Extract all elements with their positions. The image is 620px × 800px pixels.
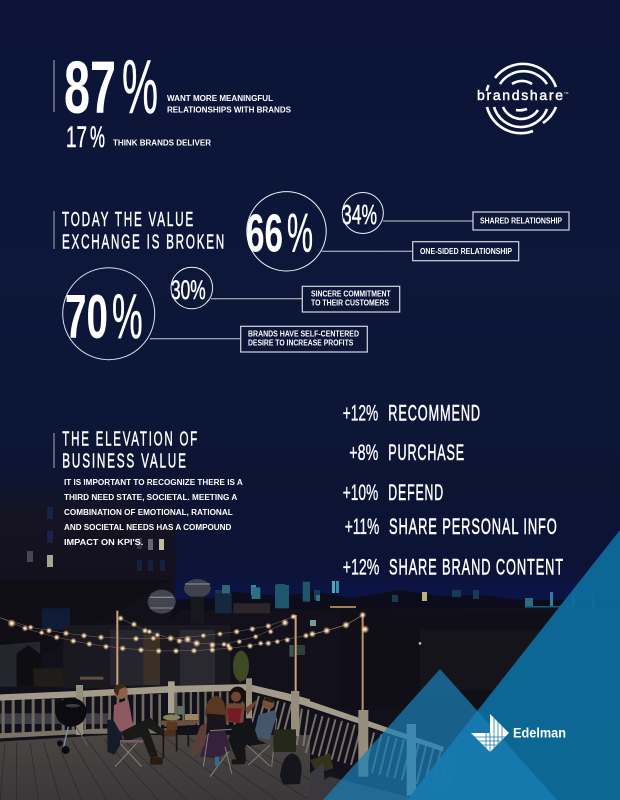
planter (273, 729, 296, 752)
heading: BUSINESS VALUE (62, 451, 188, 473)
stat: 66% one-sided relationship: ONE-SIDED RELATIONSHIP (420, 247, 513, 256)
87 percent figure: % (122, 45, 158, 130)
stat: 70% self-centered desire: DESIRE TO INCREASE PROFITS (248, 339, 354, 348)
body paragraph: THIRD NEED STATE, SOCIETAL. MEETING A (64, 493, 238, 502)
logo: brandshare: brandshare (477, 87, 563, 103)
section: today the value exchange is broken (54, 192, 569, 360)
rail continuing to the right (310, 701, 457, 800)
faded building behind text (0, 478, 175, 638)
kettle grill (55, 698, 88, 754)
logo: Edelman: Edelman (513, 725, 566, 741)
stat: 70% self-centered desire (63, 268, 367, 360)
stat: 66% one-sided relationship: % (287, 202, 313, 264)
third pole and lights (309, 611, 421, 712)
body paragraph (64, 478, 243, 547)
right section: pole, rail and far rooftops (309, 611, 457, 800)
light poles (116, 611, 297, 692)
man with beard (228, 697, 277, 767)
87 percent figure: 87 (64, 46, 116, 129)
stat: 66% one-sided relationship (246, 192, 519, 271)
body paragraph: IT IS IMPORTANT TO RECOGNIZE THERE IS A (64, 478, 243, 487)
17 percent caption: THINK BRANDS DELIVER (113, 139, 211, 148)
stat: 34% shared relationship: SHARED RELATIONSHIP (480, 216, 563, 226)
+12% recommend: RECOMMEND (388, 401, 481, 426)
+12% recommend: +12% (343, 401, 378, 426)
logo: brandshare (477, 64, 569, 133)
tree (233, 651, 249, 683)
+10% defend: DEFEND (388, 480, 444, 505)
+10% defend: +10% (343, 480, 378, 505)
+8% purchase: +8% (349, 440, 378, 465)
table (158, 706, 200, 758)
deck floor (0, 735, 310, 800)
seated man (107, 684, 176, 767)
body paragraph: COMBINATION OF EMOTIONAL, RATIONAL (64, 508, 233, 517)
17 percent figure: % (90, 121, 105, 154)
people around the table (107, 684, 302, 785)
walls and vents (0, 579, 310, 688)
dark mid-ground buildings (0, 580, 620, 800)
heading (62, 429, 199, 473)
logo: brandshare: TM (564, 91, 569, 95)
stat: 30% sincere commitment (171, 267, 400, 312)
stat: 70% self-centered desire: 70 (65, 283, 108, 352)
+12% recommend (343, 401, 481, 426)
+11% share personal info: +11% (345, 514, 379, 539)
KPI uplift list (343, 401, 564, 579)
stat: 66% one-sided relationship: 66 (246, 204, 283, 264)
+10% defend (343, 480, 444, 505)
stat block: 87% want more meaningful relationships (54, 45, 292, 154)
photo: rooftop party at night (0, 478, 620, 800)
city skyline (170, 581, 620, 640)
heading (62, 209, 226, 253)
blue triangle: large (407, 530, 620, 800)
stat: 34% shared relationship (342, 192, 569, 234)
woman laughing (226, 687, 257, 723)
87 percent caption (167, 94, 292, 114)
stat: 30% sincere commitment: TO THEIR CUSTOMERS (311, 299, 390, 308)
+12% share brand content (343, 554, 564, 579)
stat: 70% self-centered desire: BRANDS HAVE SELF-CENTERED (248, 330, 359, 339)
+8% purchase (349, 440, 465, 465)
stat: 30% sincere commitment: SINCERE COMMITMENT (311, 290, 391, 299)
heading: TODAY THE VALUE (62, 209, 195, 231)
logo: Edelman (471, 714, 566, 752)
body paragraph: IMPACT ON KPI'S. (64, 538, 143, 547)
heading: EXCHANGE IS BROKEN (62, 231, 226, 253)
stat: 30% sincere commitment: 30% (171, 275, 206, 305)
17 percent figure: 17 (66, 121, 87, 154)
blue triangle: small (323, 669, 557, 800)
string lights (0, 613, 309, 654)
left half of terrace, drawn in 3x crop coordinates (0, 579, 310, 800)
deck railing (0, 678, 310, 738)
87 percent caption: WANT MORE MEANINGFUL (167, 94, 273, 103)
stat: 70% self-centered desire: % (112, 282, 143, 352)
+11% share personal info (345, 514, 558, 539)
body paragraph: AND SOCIETAL NEEDS HAS A COMPOUND (64, 523, 232, 532)
woman seen from behind (190, 696, 232, 777)
backpack (280, 753, 302, 785)
stat: 34% shared relationship: 34% (342, 199, 377, 230)
+8% purchase: PURCHASE (388, 440, 465, 465)
section: the elevation of business value (54, 429, 243, 547)
+12% share brand content: +12% (343, 554, 379, 579)
heading: THE ELEVATION OF (62, 429, 199, 451)
87 percent caption: RELATIONSHIPS WITH BRANDS (167, 106, 292, 114)
